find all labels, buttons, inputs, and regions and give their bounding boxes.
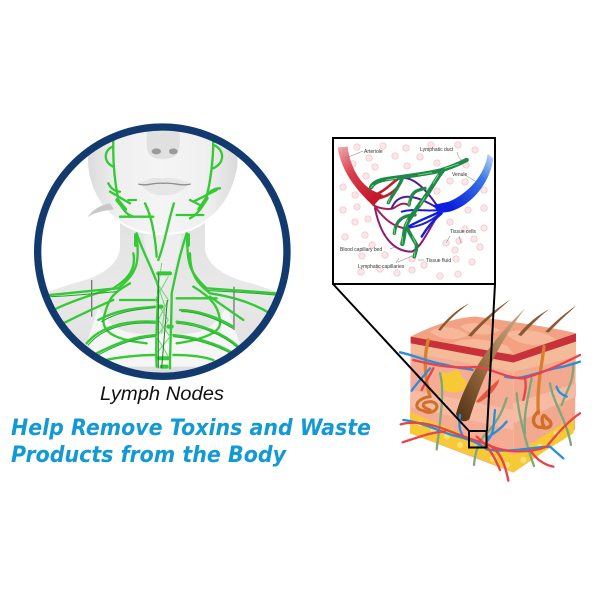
right face (513, 333, 576, 473)
labels: Venule (452, 172, 468, 178)
sweat glands (400, 340, 580, 481)
heading: Help Remove Toxins and Waste (11, 416, 371, 441)
arteriole (338, 147, 383, 206)
top surface (411, 317, 576, 355)
fat layer (410, 412, 575, 473)
labels: Tissue cells (450, 229, 476, 235)
illustration: neck and chest (48, 130, 276, 372)
label leaders (346, 151, 480, 263)
heading: Products from the Body (11, 443, 288, 468)
hair shaft with follicle (456, 308, 525, 421)
circle ring (38, 127, 287, 376)
lymph vessels (50, 140, 275, 368)
panel: inset capillary bed (333, 138, 495, 284)
marker box (469, 431, 486, 448)
venule (433, 154, 493, 213)
labels: Blood capillary bed (340, 247, 382, 253)
illustration: skin cross-section (400, 299, 580, 481)
labels: Lymphatic duct (420, 147, 454, 153)
labels: Tissue fluid (426, 258, 451, 264)
zoom connector lines (333, 284, 495, 431)
dermis bands (410, 383, 576, 430)
blood vessels (400, 352, 580, 458)
panel: lymph nodes circle (30, 120, 297, 387)
labels (340, 147, 476, 270)
labels: Lymphatic capillaries (358, 264, 405, 270)
left face (410, 337, 513, 473)
heading (11, 416, 371, 468)
nose (146, 130, 180, 159)
epidermis band (411, 333, 576, 363)
lips (140, 178, 190, 195)
caption: Lymph Nodes: Lymph Nodes (100, 384, 225, 405)
labels: Arteriole (364, 149, 383, 155)
lymph vessels (437, 365, 573, 466)
hairs (438, 299, 577, 337)
lymphatic vessels (371, 160, 467, 257)
tissue cells (340, 142, 487, 279)
capillary bed (373, 178, 442, 252)
